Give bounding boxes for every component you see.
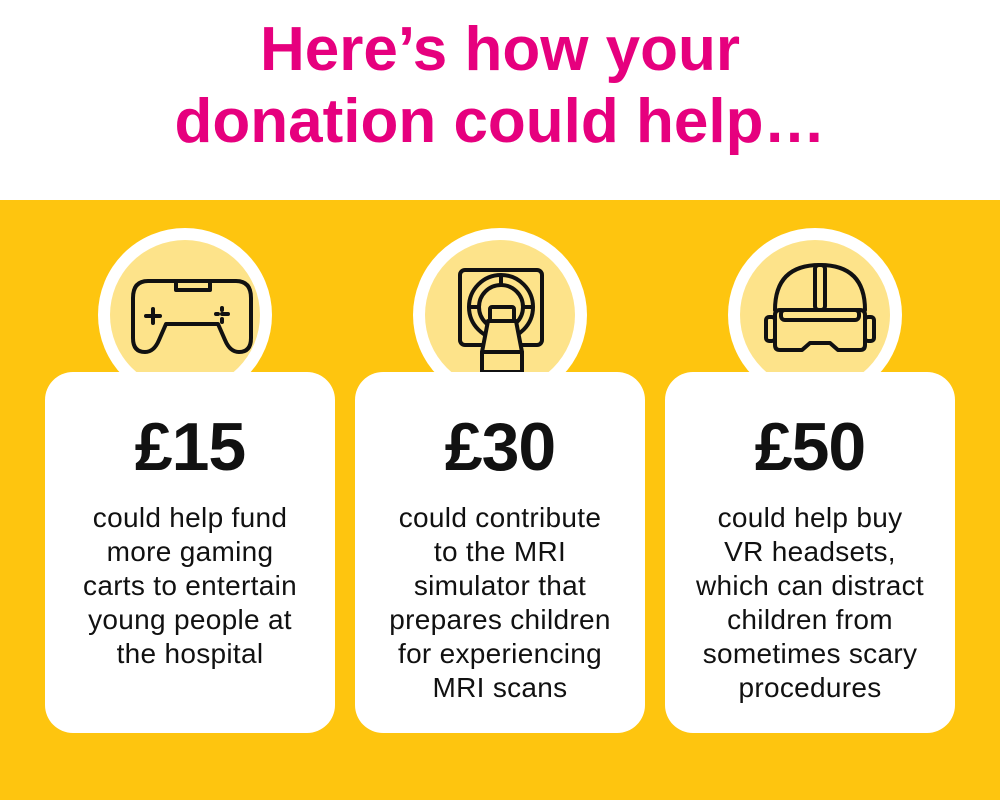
text: £30 description — [389, 502, 611, 703]
text: £30 description: prepares children — [389, 604, 611, 635]
text: £50 description — [696, 502, 924, 703]
icon: VR headset — [728, 228, 902, 402]
title: Here’s how your — [260, 15, 740, 84]
text: £15 description: carts to entertain — [83, 570, 297, 601]
text: £30 description: simulator that — [414, 570, 586, 601]
text: £50 description: procedures — [738, 672, 882, 703]
text: £50 description: could help buy — [718, 502, 902, 533]
text: £15 description: the hospital — [117, 638, 263, 669]
amount: £50: £50 — [755, 409, 865, 485]
text: £15 description — [83, 502, 297, 669]
text: £15 description: young people at — [88, 604, 292, 635]
yellow background panel — [0, 200, 1000, 800]
card: £30 — [355, 372, 645, 733]
text: £30 description: to the MRI — [434, 536, 566, 567]
text: £50 description: children from — [727, 604, 893, 635]
text: £30 description: could contribute — [399, 502, 601, 533]
icon: MRI scanner — [413, 228, 587, 402]
title: donation could help… — [175, 87, 825, 156]
text: £50 description: which can distract — [696, 570, 924, 601]
text: £15 description: could help fund — [93, 502, 287, 533]
icon: gamepad — [98, 228, 272, 402]
amount: £15: £15 — [135, 409, 245, 485]
title — [175, 15, 825, 156]
text: £50 description: sometimes scary — [703, 638, 917, 669]
amount: £30: £30 — [445, 409, 555, 485]
card: £15 — [45, 372, 335, 733]
text: £50 description: VR headsets, — [724, 536, 896, 567]
text: £30 description: for experiencing — [398, 638, 602, 669]
card: £50 — [665, 372, 955, 733]
text: £15 description: more gaming — [107, 536, 273, 567]
text: £30 description: MRI scans — [433, 672, 567, 703]
